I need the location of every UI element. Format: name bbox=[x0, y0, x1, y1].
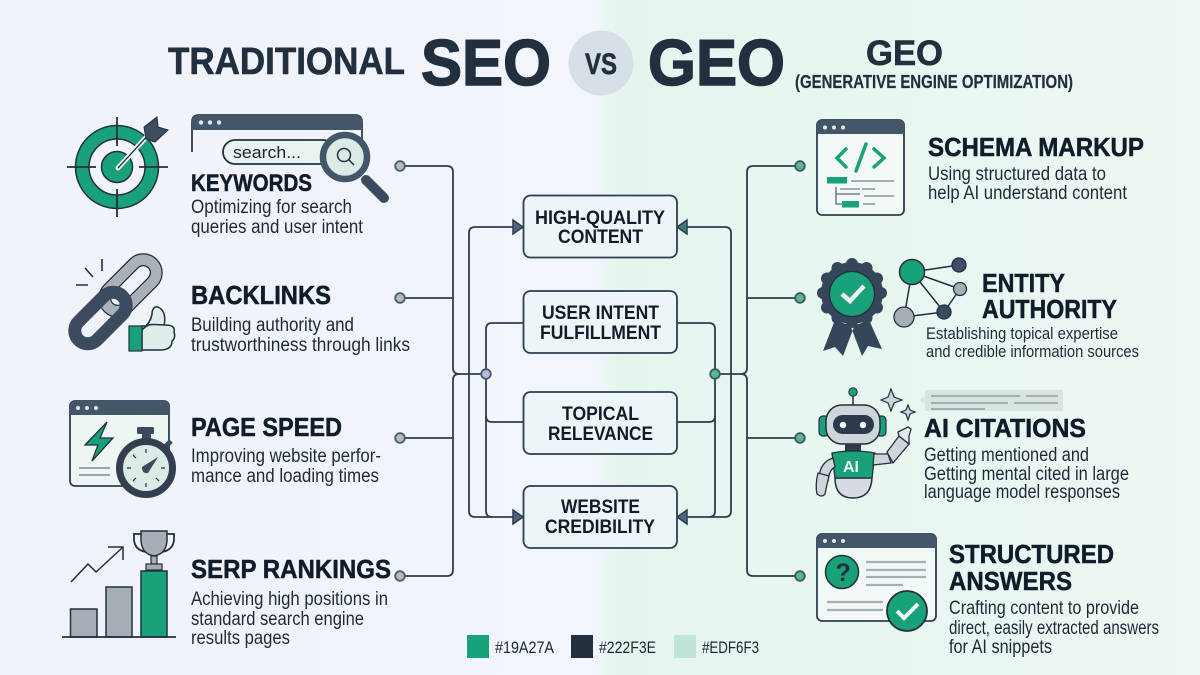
text: serp rankings bbox=[191, 554, 391, 649]
text: backlinks: trustworthiness through links bbox=[191, 335, 410, 356]
icon: target with arrow bbox=[67, 117, 168, 217]
legend: #222F3E bbox=[599, 638, 656, 657]
text: structured answers: Crafting content to provide bbox=[949, 598, 1139, 619]
box: user intent fulfillment: USER INTENT bbox=[542, 303, 659, 324]
box: topical relevance bbox=[524, 392, 677, 454]
text: page speed: mance and loading times bbox=[191, 466, 379, 487]
title: VS bbox=[585, 48, 617, 81]
icon: search window with magnifier: search... bbox=[233, 144, 301, 162]
text: entity authority: and credible information sources bbox=[926, 342, 1139, 361]
icon: structured answer window: ? bbox=[836, 559, 851, 587]
text: structured answers: for AI snippets bbox=[949, 637, 1052, 658]
box: topical relevance: TOPICAL bbox=[562, 404, 639, 425]
text: AI citations: AI CITATIONS bbox=[924, 413, 1086, 443]
icon: schema code window bbox=[817, 120, 904, 215]
box: high-quality content bbox=[524, 196, 677, 258]
text: page speed bbox=[191, 412, 381, 487]
box: topical relevance: RELEVANCE bbox=[548, 424, 653, 445]
text: AI citations: language model responses bbox=[924, 482, 1120, 503]
text: keywords: Optimizing for search bbox=[191, 197, 352, 218]
icon: ranking bars with trophy bbox=[62, 531, 176, 637]
box: high-quality content: HIGH-QUALITY bbox=[535, 208, 665, 229]
text: keywords: queries and user intent bbox=[191, 217, 364, 238]
text: schema markup: help AI understand content bbox=[928, 183, 1128, 204]
icon: AI robot bbox=[816, 388, 915, 498]
text: entity authority: AUTHORITY bbox=[982, 294, 1117, 324]
text: schema markup: SCHEMA MARKUP bbox=[928, 132, 1144, 162]
box: high-quality content: CONTENT bbox=[558, 227, 643, 248]
legend: #19A27A bbox=[495, 638, 555, 657]
legend: #EDF6F3 bbox=[702, 638, 759, 657]
icon: AI robot: AI bbox=[843, 459, 859, 476]
text: keywords: KEYWORDS bbox=[191, 170, 312, 197]
icon: search window with magnifier bbox=[192, 115, 384, 198]
box: user intent fulfillment: FULFILLMENT bbox=[540, 323, 661, 344]
text: backlinks: BACKLINKS bbox=[191, 280, 331, 310]
text: keywords bbox=[191, 170, 364, 238]
text: serp rankings: standard search engine bbox=[191, 609, 364, 630]
text: serp rankings: SERP RANKINGS bbox=[191, 554, 391, 584]
text: serp rankings: results pages bbox=[191, 628, 290, 649]
title: TRADITIONAL bbox=[168, 41, 405, 83]
title: GEO bbox=[648, 26, 785, 99]
text: schema markup bbox=[928, 132, 1144, 204]
icon: chain links with thumbs up bbox=[69, 254, 175, 351]
connectors: SEO side bbox=[395, 161, 523, 581]
callout: citation bubble bbox=[920, 390, 1063, 411]
text: page speed: PAGE SPEED bbox=[191, 412, 342, 442]
icon: page speed window and stopwatch bbox=[70, 401, 172, 494]
icon: entity network bbox=[894, 258, 966, 327]
title bbox=[168, 26, 1073, 99]
text: structured answers: ANSWERS bbox=[949, 566, 1072, 596]
title: SEO bbox=[421, 26, 551, 99]
legend bbox=[467, 635, 759, 658]
box: website credibility: WEBSITE bbox=[561, 497, 640, 518]
title: (GENERATIVE ENGINE OPTIMIZATION) bbox=[795, 72, 1073, 92]
text: schema markup: Using structured data to bbox=[928, 164, 1106, 185]
text: entity authority: Establishing topical expertise bbox=[926, 324, 1118, 343]
text: backlinks bbox=[191, 280, 410, 356]
icon: authority badge bbox=[817, 258, 887, 356]
text: backlinks: Building authority and bbox=[191, 315, 354, 336]
title: GEO bbox=[866, 34, 943, 73]
text: AI citations: Getting mentioned and bbox=[924, 445, 1089, 466]
text: structured answers bbox=[949, 539, 1159, 658]
text: entity authority: ENTITY bbox=[982, 268, 1065, 298]
box: website credibility: CREDIBILITY bbox=[545, 517, 655, 538]
text: serp rankings: Achieving high positions in bbox=[191, 589, 388, 610]
text: AI citations bbox=[924, 413, 1129, 503]
box: user intent fulfillment bbox=[524, 291, 677, 353]
text: entity authority bbox=[926, 268, 1139, 361]
text: structured answers: STRUCTURED bbox=[949, 539, 1114, 569]
text: page speed: Improving website perfor- bbox=[191, 446, 381, 467]
box: website credibility bbox=[524, 486, 677, 548]
icon: structured answer window bbox=[817, 534, 936, 631]
connectors: GEO side bbox=[677, 161, 805, 581]
text: AI citations: Getting mental cited in large bbox=[924, 464, 1129, 485]
